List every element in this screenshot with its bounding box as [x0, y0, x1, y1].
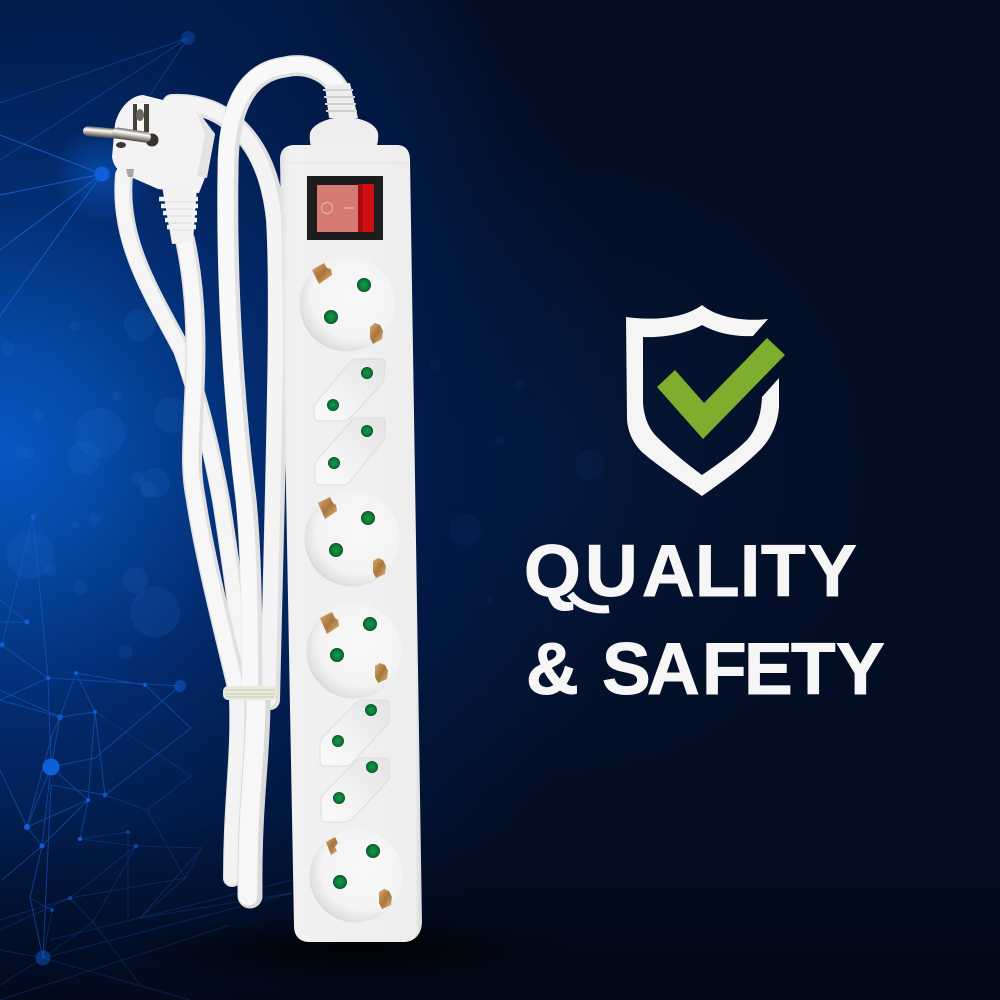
- cable tie: [223, 686, 277, 700]
- shield outline: [626, 305, 779, 496]
- cord: main strand to strip: [226, 65, 342, 700]
- shield check icon: [626, 305, 785, 496]
- schuko socket 1: [300, 256, 394, 352]
- euro socket 1: [314, 359, 385, 421]
- schuko socket 2: [304, 492, 400, 586]
- rocker switch: [307, 176, 383, 240]
- cord: lower right loop: [248, 700, 258, 896]
- Q tail accent: [570, 594, 609, 609]
- background: faint right-side bokeh: [430, 360, 605, 604]
- plug earth slot: [133, 103, 149, 133]
- heading line: QUALITY: QUALITY: [524, 531, 857, 612]
- plug: [83, 95, 215, 244]
- background: dim network mesh lines: [0, 712, 292, 1000]
- cord: lower left loop: [231, 700, 238, 878]
- background: lower network mesh lines: [0, 517, 191, 958]
- schuko socket 3: [306, 604, 402, 698]
- cord: left strand from plug: [122, 175, 246, 700]
- strip strain relief and neck: [310, 83, 378, 152]
- plug contact pins: [83, 126, 158, 148]
- plug strain relief: [159, 186, 198, 244]
- heading: QUALITY & SAFETY: [524, 531, 885, 710]
- schuko socket 4: [310, 830, 402, 922]
- cord: rear arc from plug behind strip: [172, 103, 278, 700]
- power cord strands: [122, 65, 342, 896]
- euro socket 4: [321, 758, 389, 822]
- heading line: & SAFETY: &SAFETY: [526, 629, 885, 710]
- floor shadow under the power strip: [120, 914, 580, 986]
- background: network nodes: [0, 31, 195, 966]
- background: bokeh circles: [1, 309, 190, 659]
- background: upper network lines: [0, 38, 188, 316]
- cord: middle strand from plug relief: [184, 240, 240, 700]
- green check mark: [657, 338, 785, 439]
- euro socket 3: [320, 700, 389, 766]
- plug body: [112, 95, 215, 193]
- euro socket 2: [315, 418, 385, 485]
- power strip body: [280, 145, 422, 942]
